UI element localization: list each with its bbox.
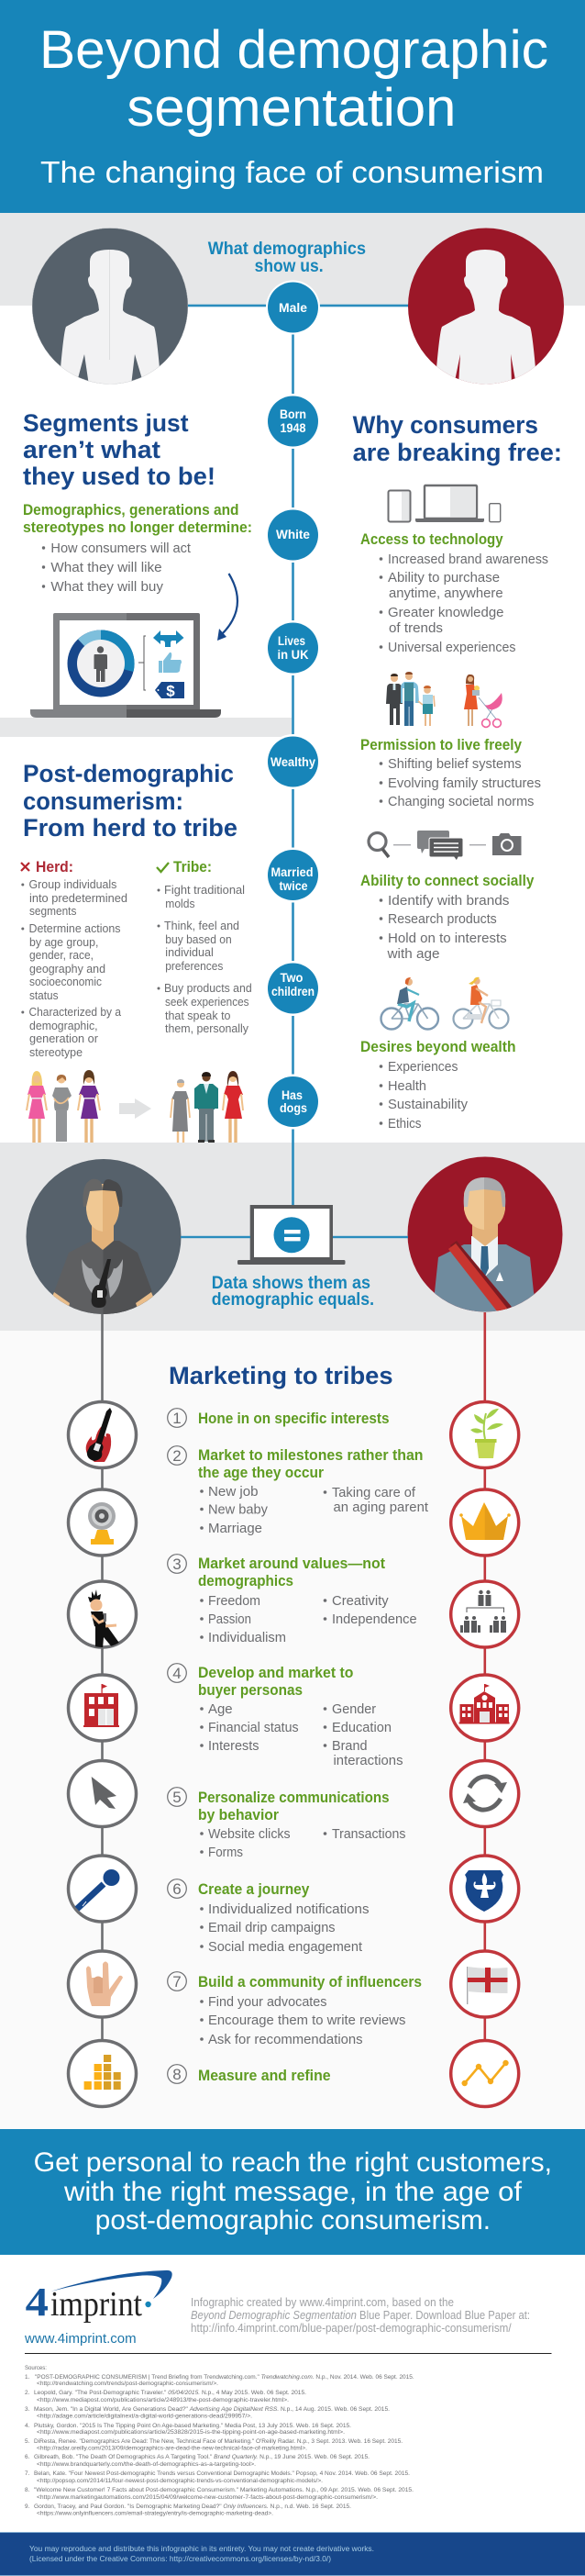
- column: tribe: buy based on: [165, 932, 232, 946]
- logo: 4imprint: www.4imprint.com: [24, 2331, 137, 2347]
- step 4: Age: [208, 1702, 233, 1717]
- step 2: Market to milestones rather than: [198, 1447, 424, 1464]
- node: White: White: [276, 527, 310, 541]
- sources list: <http://trendwatching.com/trends/post-demographic-consumerism/>.: [37, 2381, 218, 2387]
- credit text: Infographic created by www.4imprint.com, based on the: [191, 2296, 454, 2309]
- step 6: 6: [172, 1880, 182, 1898]
- subheading: no longer determine: stereotypes no longer determine:: [23, 519, 252, 536]
- step 7: [168, 1972, 422, 2047]
- caption: demographic equals: Data shows them as: [212, 1274, 370, 1293]
- panel: segments: [23, 409, 252, 718]
- step 4: [168, 1664, 403, 1768]
- step 2: 2: [172, 1447, 182, 1465]
- column: herd: gender, race,: [29, 948, 94, 962]
- column: herd: stereotype: [29, 1045, 83, 1059]
- icon: England flag: [451, 1951, 519, 2017]
- illustration: herd of women: [27, 1070, 100, 1143]
- icon: office building: [68, 1675, 136, 1741]
- node: Wealthy: Wealthy: [270, 754, 315, 769]
- icon: family tree: [451, 1581, 519, 1647]
- step 3: Individualism: [208, 1631, 286, 1645]
- node: Two children: [266, 961, 321, 1016]
- step 7: Find your advocates: [208, 1995, 326, 2010]
- sources list: <http://www.brandquarterly.com/the-death-of-demographics-as-a-targeting-tool>.: [37, 2461, 256, 2468]
- icon: microphone: [68, 1856, 136, 1922]
- step 3: [168, 1555, 417, 1645]
- credit text: Beyond Demographic Segmentation Blue Paper. Download Blue Paper at:: [191, 2309, 530, 2322]
- column: herd: Group individuals: [29, 877, 117, 891]
- heading: what demographics show us: show us.: [255, 257, 324, 276]
- step 6: Social media engagement: [208, 1940, 362, 1955]
- step 7: Build a community of influencers: [198, 1974, 422, 1991]
- section: desires beyond wealth: Ethics: [388, 1117, 422, 1132]
- credit text: [191, 2296, 530, 2335]
- section: access to technology: Universal experiences: [388, 641, 515, 655]
- step 2: New job: [208, 1485, 259, 1500]
- step 2: Marriage: [208, 1522, 262, 1536]
- donut chart: [68, 630, 135, 697]
- column: herd: status: [29, 988, 59, 1002]
- icon: rock hand: [68, 1951, 136, 2017]
- silhouette: left person: [32, 228, 188, 390]
- node: Has dogs: dogs: [280, 1100, 307, 1115]
- step 3: demographics: [198, 1573, 293, 1589]
- icon: thumbs up: [159, 652, 182, 673]
- node: Male: [266, 281, 320, 334]
- icon: stacked bar blocks: [68, 2041, 136, 2107]
- bullet list: What they will like: [50, 561, 162, 575]
- heading: marketing to tribes: Marketing to tribes: [169, 1362, 393, 1389]
- icon: cursor: [68, 1760, 136, 1826]
- column: herd: segments: [29, 904, 77, 918]
- bullet list: How consumers will act: [50, 541, 191, 556]
- section: permission to live freely: Shifting belief systems: [388, 757, 522, 772]
- heading: what demographics show us: [208, 240, 366, 276]
- sources list: "POST-DEMOGRAPHIC CONSUMERISM | Trend Briefing from Trendwatching.com." Trendwatching.com. N.p., Nov. 2014. Web. 06 Sept. 2015.: [35, 2374, 414, 2381]
- subheading: no longer determine: [23, 502, 252, 536]
- column: tribe: [157, 858, 252, 1035]
- step 3: Passion: [208, 1612, 251, 1627]
- step 5: by behavior: [198, 1807, 280, 1823]
- step 4: Education: [332, 1721, 392, 1735]
- title: [39, 20, 548, 138]
- section: desires beyond wealth: Desires beyond wealth: [360, 1039, 515, 1055]
- icon: two cyclists: [381, 977, 508, 1030]
- section: desires beyond wealth: [360, 1039, 515, 1132]
- node: Married twice: [266, 848, 321, 903]
- icon: shield: [451, 1856, 519, 1922]
- node: Two children: children: [271, 984, 315, 998]
- step 4: 4: [172, 1665, 182, 1682]
- column: herd: generation or: [29, 1032, 99, 1045]
- node: Born 1948: [266, 394, 321, 449]
- logo: 4imprint: imprint: [50, 2285, 142, 2324]
- column: herd: geography and: [29, 962, 105, 976]
- license bar: You may reproduce and distribute this infographic in its entirety. You may not create derivative works.: [29, 2544, 374, 2553]
- arrow: herd to tribe: [119, 1098, 151, 1119]
- step 2: the age they occur: [198, 1465, 325, 1481]
- bullet list: [42, 541, 191, 595]
- sources list: Gilbreath, Bob. "The Death Of Demographics As A Targeting Tool." Brand Quarterly. N.p., 19 June 2015. Web. 06 Sept. 2015.: [34, 2454, 370, 2460]
- step 3: 3: [172, 1556, 182, 1573]
- section: access to technology: Increased brand awareness: [388, 552, 548, 567]
- illustration: rock fan: [26, 1159, 182, 1321]
- sources list: 3.: [25, 2406, 30, 2413]
- sources list: "Welcome New Customer! 7 Facts about Post-demographic Consumerism." Marketing Automations. N.p., 09 Apr. 2015. Web. 06 Sept. 2015.: [34, 2487, 414, 2493]
- icon: devices: [389, 485, 501, 522]
- section: desires beyond wealth: Experiences: [388, 1060, 458, 1075]
- node: Male: Male: [279, 300, 307, 315]
- column: tribe: preferences: [165, 959, 224, 973]
- heading: why consumers: are breaking free:: [353, 439, 562, 466]
- heading: post-demographic: [23, 760, 237, 842]
- step 2: [168, 1446, 428, 1536]
- icon: price tag: [155, 682, 184, 699]
- step 6: Create a journey: [198, 1881, 310, 1898]
- step 3: Creativity: [332, 1594, 389, 1609]
- subtitle: The changing face of consumerism: [40, 155, 544, 189]
- icon: price tag: $: [166, 683, 175, 699]
- step 1: Hone in on specific interests: [198, 1411, 389, 1427]
- step 5: [168, 1788, 405, 1860]
- sources list: 6.: [25, 2454, 30, 2460]
- grey band: lower left: [0, 718, 292, 737]
- column: tribe: molds: [165, 897, 195, 910]
- step 7: Ask for recommendations: [208, 2033, 363, 2047]
- sources list: Leopold, Gary. "The Post-Demographic Traveler." 05/04/2015. N.p., 4 May 2015. Web. 06 Sept. 2015.: [34, 2390, 306, 2396]
- column: herd: Characterized by a: [29, 1005, 122, 1019]
- node: Lives in UK: in UK: [277, 647, 308, 662]
- sources list: Plutsky, Gordon. "2015 Is The Tipping Point On Age-based Marketing." Media Post, 13 July 2015. Web. 16 Sept. 2015.: [34, 2423, 351, 2429]
- step 3: Market around values—not: [198, 1556, 385, 1572]
- sources list: 8.: [25, 2487, 30, 2493]
- caption: demographic equals: [212, 1274, 374, 1310]
- icon: potted plant: [451, 1402, 519, 1468]
- section: access to technology: [360, 531, 548, 655]
- step 3: Independence: [332, 1612, 417, 1627]
- icon: laptop with equals sign: [237, 1205, 345, 1265]
- column: tribe: that speak to: [165, 1009, 231, 1022]
- column: tribe: Buy products and: [164, 981, 252, 995]
- bracket: [138, 636, 146, 690]
- caption: demographic equals: demographic equals.: [212, 1290, 374, 1310]
- logo: 4imprint: 4: [26, 2280, 49, 2325]
- license bar: (Licensed under the Creative Commons: http://creativecommons.org/licenses/by-nd/3.0/): [29, 2554, 331, 2563]
- heading: post-demographic: Post-demographic: [23, 760, 234, 787]
- section: ability to connect socially: [360, 873, 535, 962]
- section: ability to connect socially: Ability to connect socially: [360, 873, 535, 889]
- column: tribe: individual: [165, 945, 214, 959]
- sources list: 9.: [25, 2504, 30, 2510]
- node: Wealthy: [266, 734, 321, 789]
- section: ability to connect socially: Hold on to interests: [388, 931, 507, 946]
- node: Married twice: Married: [271, 864, 314, 879]
- step 4: Financial status: [208, 1721, 299, 1735]
- section: access to technology: Greater knowledge: [388, 606, 504, 620]
- section: ability to connect socially: Identify with brands: [388, 894, 510, 909]
- step 5: Forms: [208, 1846, 243, 1860]
- step 6: Individualized notifications: [208, 1902, 369, 1917]
- icon: crown: [451, 1489, 519, 1556]
- section: permission to live freely: [360, 737, 541, 809]
- grey band: top: [0, 213, 585, 306]
- call to action banner: post-demographic consumerism.: [95, 2205, 491, 2236]
- column: herd: Herd:: [36, 858, 73, 875]
- column: tribe: Think, feel and: [164, 919, 239, 932]
- section: desires beyond wealth: Health: [388, 1079, 426, 1094]
- bullet list: What they will buy: [50, 580, 164, 595]
- step 8: Measure and refine: [198, 2068, 331, 2084]
- column: tribe: Tribe:: [173, 858, 212, 875]
- call to action banner: Get personal to reach the right customers,: [34, 2147, 552, 2178]
- timeline nodes: [266, 281, 321, 1129]
- arrow: curved to laptop: [217, 574, 237, 641]
- node: Has dogs: [266, 1074, 321, 1129]
- section: ability to connect socially: Research products: [388, 912, 497, 927]
- sources list: <http://www.mediapost.com/publications/article/248913/the-post-demographic-traveler.html>.: [37, 2397, 289, 2403]
- panel: marketing to tribes: [168, 1362, 428, 2084]
- step 4: Develop and market to: [198, 1665, 353, 1681]
- heading: why consumers: Why consumers: [353, 411, 538, 439]
- icon: school: [451, 1675, 519, 1741]
- node: Born 1948: Born: [280, 407, 306, 421]
- column: herd: demographic,: [29, 1019, 98, 1032]
- heading: segments: aren’t what: [23, 436, 160, 463]
- icon: check: [157, 863, 169, 872]
- step 6: Email drip campaigns: [208, 1921, 336, 1935]
- connector: laptop to figures: [181, 1236, 408, 1238]
- sources list: 5.: [25, 2438, 30, 2445]
- divider rule: [25, 2353, 552, 2354]
- heading: post-demographic: consumerism:: [23, 787, 183, 815]
- sources list: Gordon, Tracey, and Paul Gordon. "Is Demographic Marketing Dead?" Only Influencers. N.p., n.d. Web. 16 Sept. 2015.: [34, 2504, 351, 2510]
- column: herd: socioeconomic: [29, 975, 102, 988]
- icon: cross: [21, 863, 29, 871]
- icon column: left: [68, 1402, 136, 2107]
- sources list: 7.: [25, 2470, 30, 2477]
- step 7: Encourage them to write reviews: [208, 2013, 405, 2028]
- sources list: <http://adage.com/article/digitalnext/a-digital-world-generations-dead/299957/>.: [37, 2414, 252, 2419]
- sources list: DiResta, Renee. "Demographics Are Dead: The New, Technical Face of Marketing." O'Reilly Radar. N.p., 3 Sept. 2013. Web. 16 Sept. 2015.: [34, 2438, 403, 2445]
- section: access to technology: Ability to purchase: [388, 571, 500, 585]
- subheading: no longer determine: Demographics, generations and: [23, 502, 238, 519]
- logo: 4imprint: [24, 2270, 172, 2347]
- step 4: buyer personas: [198, 1682, 303, 1699]
- step 2: Taking care of: [332, 1486, 416, 1500]
- heading: post-demographic: From herd to tribe: [23, 814, 237, 842]
- icon: mother with pram: [464, 675, 502, 727]
- section: ability to connect socially: with age: [386, 947, 440, 962]
- icon: fork arrows: [153, 630, 183, 647]
- step 2: an aging parent: [334, 1500, 428, 1515]
- step 5: 5: [172, 1789, 182, 1806]
- heading: segments: Segments just: [23, 409, 189, 437]
- icon: refresh arrows: [451, 1760, 519, 1826]
- step 4: interactions: [334, 1754, 403, 1768]
- node: Lives in UK: Lives: [278, 633, 305, 648]
- step 2: New baby: [208, 1503, 269, 1518]
- sources list: <http://popsop.com/2014/11/four-newest-post-demographic-trends-vs-conventional-demographic-models/>.: [37, 2478, 323, 2484]
- step 7: 7: [172, 1973, 182, 1991]
- sources list: Sources:: [25, 2365, 47, 2371]
- grey band: middle: [0, 1143, 585, 1331]
- connector: horizontal and vertical timeline lines: [183, 305, 413, 1205]
- section: permission to live freely: Changing societal norms: [388, 795, 534, 809]
- column: tribe: seek experiences: [165, 995, 249, 1009]
- section: permission to live freely: Evolving family structures: [388, 776, 541, 791]
- step 8: [168, 2065, 331, 2084]
- heading: segments: they used to be!: [23, 463, 215, 490]
- section: access to technology: of trends: [389, 621, 443, 636]
- marketing panel background: [0, 1331, 585, 2129]
- header banner: [0, 0, 585, 213]
- call to action banner: [0, 2129, 585, 2255]
- node: Lives in UK: [266, 620, 321, 675]
- column: tribe: them, personally: [165, 1021, 248, 1035]
- step 4: Brand: [332, 1739, 367, 1754]
- column: herd: by age group,: [29, 935, 98, 949]
- step 5: Personalize communications: [198, 1790, 389, 1806]
- illustration: businessman with sash: [407, 1156, 563, 1321]
- icon: search, chat and camera: [369, 831, 521, 861]
- icon: laptop with donut chart: [30, 613, 221, 718]
- node: Two children: Two: [281, 970, 303, 985]
- step 4: Interests: [208, 1739, 259, 1754]
- icon: singer: [68, 1581, 136, 1649]
- license bar: [0, 2532, 585, 2576]
- sources list: [25, 2365, 414, 2516]
- icon: family: [386, 672, 435, 726]
- step 8: 8: [172, 2066, 182, 2083]
- title: Beyond demographic: [39, 20, 548, 80]
- heading: why consumers: [353, 411, 562, 466]
- section: access to technology: Access to technology: [360, 531, 503, 548]
- sources list: 2.: [25, 2390, 30, 2396]
- column: herd: Determine actions: [29, 921, 121, 935]
- step 6: [168, 1879, 369, 1955]
- sources list: <http://www.marketingautomations.com/2015/04/09/welcome-new-customer-7-facts-about-post-demographic-consumerism/>.: [37, 2494, 378, 2501]
- icon column: right: [451, 1402, 519, 2107]
- column: herd: into predetermined: [29, 891, 127, 905]
- connector: vertical icon lines: [101, 1312, 486, 2076]
- step 5: Website clicks: [208, 1827, 291, 1842]
- sources list: Mason, Jem. "In a Digital World, Are Generations Dead?" Advertising Age DigitalNext RSS. N.p., 14 Aug. 2015. Web. 06 Sept. 2015.: [34, 2406, 390, 2413]
- node: Born 1948: 1948: [281, 420, 306, 435]
- credit text: http://info.4imprint.com/blue-paper/post-demographic-consumerism/: [191, 2322, 512, 2335]
- section: desires beyond wealth: Sustainability: [388, 1098, 469, 1112]
- column: tribe: Fight traditional: [164, 883, 245, 897]
- sources list: <http://www.mediapost.com/publications/article/253828/2015-is-the-tipping-point-on-age-based-marketing.html>.: [37, 2429, 345, 2436]
- icon: line chart: [451, 2041, 519, 2107]
- step 1: 1: [172, 1410, 182, 1427]
- column: herd: [21, 858, 127, 1059]
- step 3: Freedom: [208, 1594, 260, 1609]
- icon: flaming guitar: [68, 1402, 136, 1468]
- illustration: diverse tribe: [171, 1071, 243, 1143]
- panel: why consumers break free: [353, 411, 562, 1132]
- node: Married twice: twice: [279, 878, 308, 893]
- sources list: <https://www.onlyinfluencers.com/email-strategy/entry/is-demographic-marketing-dead>.: [37, 2511, 273, 2516]
- sources list: 4.: [25, 2423, 30, 2429]
- section: access to technology: anytime, anywhere: [389, 586, 503, 601]
- section: permission to live freely: Permission to live freely: [360, 737, 523, 753]
- heading: what demographics show us: What demographics: [208, 240, 366, 259]
- call to action banner: with the right message, in the age of: [63, 2177, 523, 2207]
- heading: segments: [23, 409, 215, 490]
- panel: post-demographic consumerism: [21, 760, 252, 1143]
- icon: webcam trophy: [68, 1489, 136, 1556]
- sources list: Belan, Kate. "Four Newest Post-demographic Trends versus Conventional Demographic Models." Popsop, 4 Nov. 2014. Web. 06 Sept. 2015.: [34, 2470, 410, 2477]
- node: White: [266, 507, 321, 563]
- step 5: Transactions: [332, 1827, 405, 1842]
- step 4: Gender: [332, 1702, 376, 1717]
- silhouette: right person: [408, 228, 564, 390]
- sources list: 1.: [25, 2374, 30, 2381]
- title: segmentation: [127, 78, 456, 138]
- sources list: <http://radar.oreilly.com/2013/09/demographics-are-dead-the-new-technical-face-of-marketing.html>.: [37, 2445, 307, 2452]
- node: Has dogs: Has: [281, 1087, 303, 1102]
